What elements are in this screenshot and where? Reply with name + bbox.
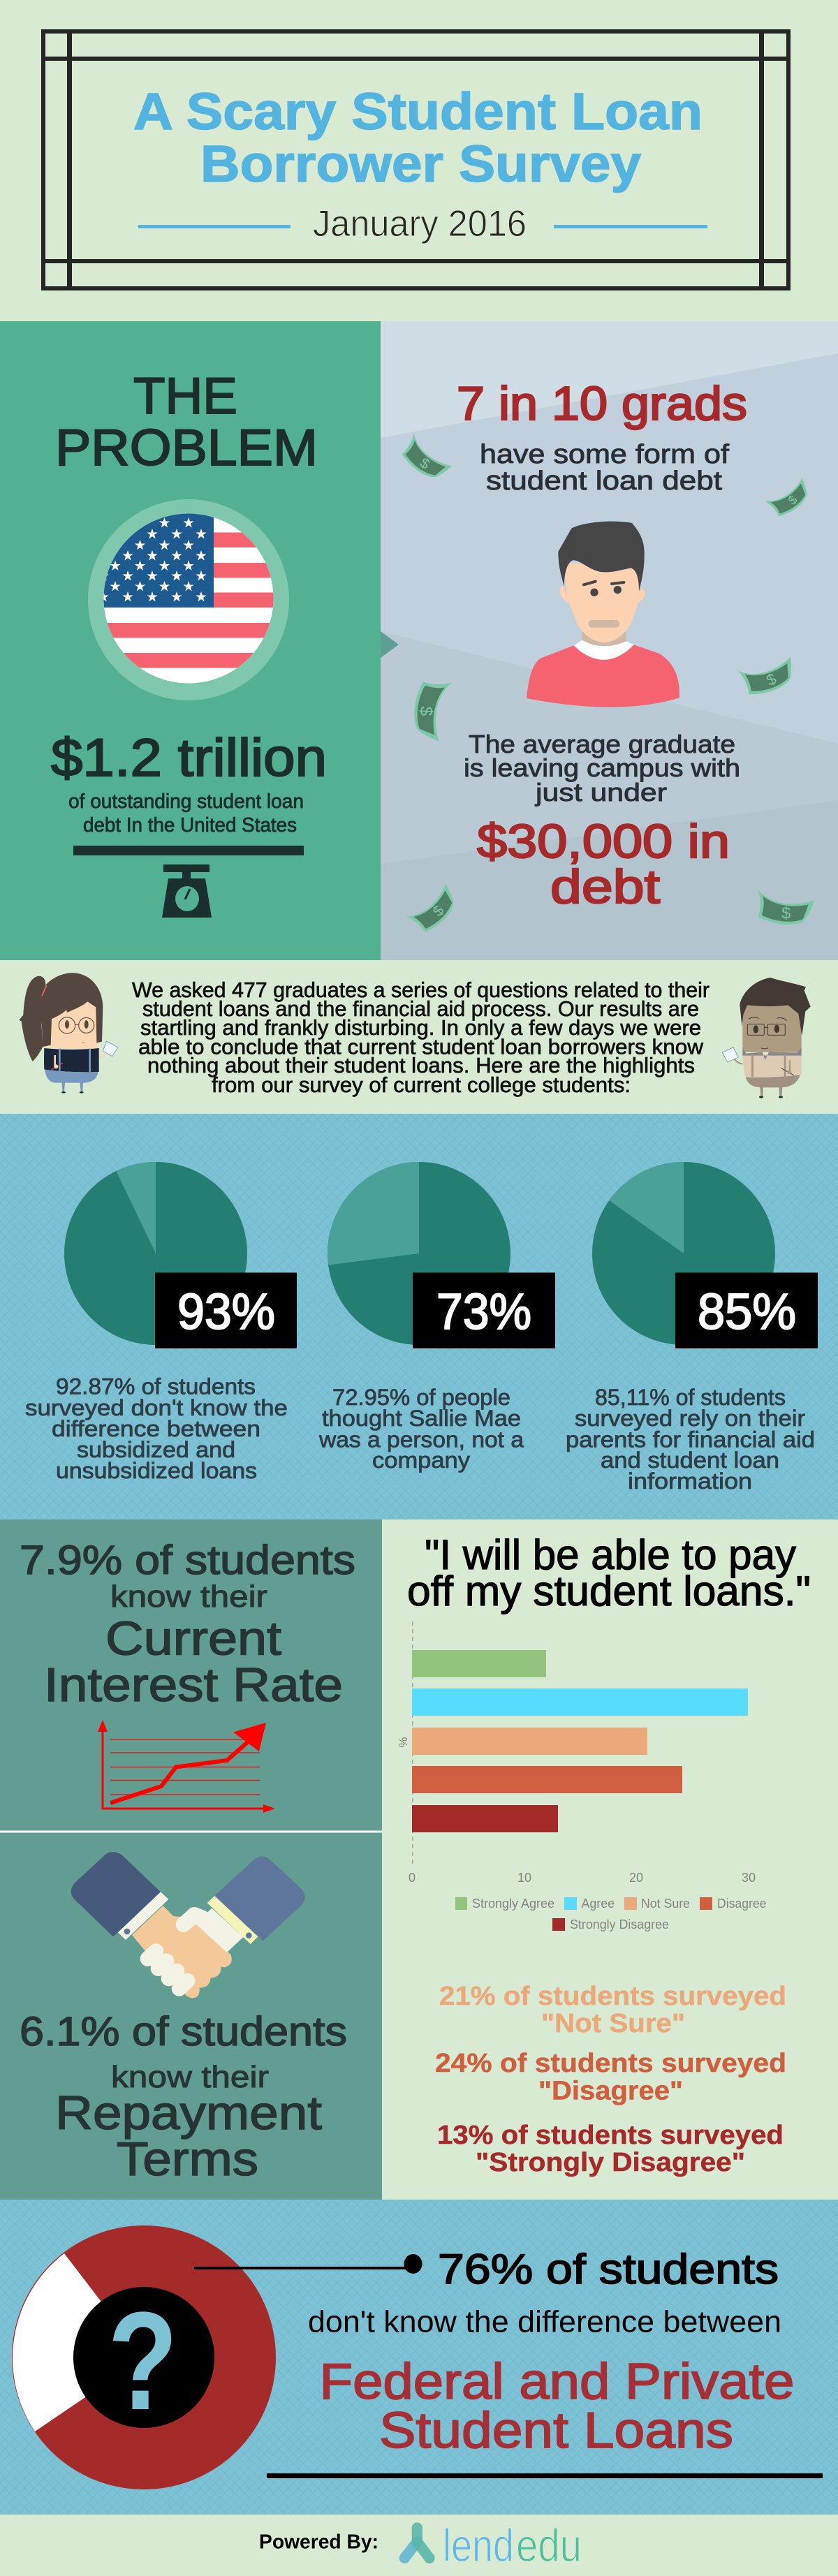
bar chart: repayment confidence xyxy=(397,1621,767,1931)
pie chart: 73% xyxy=(328,1162,555,1348)
stat: 30,000 in debt: debt xyxy=(550,860,660,913)
panel: header xyxy=(41,29,791,290)
bar chart: repayment confidence: 30 xyxy=(742,1871,756,1885)
text: survey intro: able to conclude that current student loan borrowers know xyxy=(138,1035,704,1059)
caption: rely on parents: information xyxy=(628,1469,752,1494)
panel: ability to pay xyxy=(397,1531,811,2177)
text: average graduate: is leaving campus with xyxy=(464,753,740,782)
text: interest rate stat: know their xyxy=(110,1580,267,1614)
caption: subsidized loans: unsubsidized loans xyxy=(56,1458,257,1483)
panel: interest rate knowledge xyxy=(0,1519,382,1832)
icon: rising line chart xyxy=(98,1720,275,1813)
text: survey intro: from our survey of current college students: xyxy=(212,1073,631,1097)
panel: survey intro xyxy=(19,973,811,1098)
stat: not sure xyxy=(439,1982,786,2038)
stat: 76% of students: 76% of students xyxy=(438,2246,779,2292)
stat: 1.2 trillion: $1.2 trillion xyxy=(51,728,327,788)
chart legend: Disagree xyxy=(717,1897,767,1911)
pie chart: 85% xyxy=(592,1162,818,1348)
caption: Sallie Mae xyxy=(318,1385,524,1473)
divider xyxy=(0,1831,382,1832)
text: survey intro: We asked 477 graduates a series of questions related to their xyxy=(132,978,710,1002)
panel: repayment terms knowledge xyxy=(0,1832,382,2200)
text: outstanding debt: debt In the United States xyxy=(83,814,297,837)
title: Borrower Survey xyxy=(200,135,641,193)
text: survey intro: nothing about their student loans. Here are the highlights xyxy=(147,1053,695,1077)
heading: quote: "I will be able to pay xyxy=(425,1531,796,1578)
icon: dollar bill xyxy=(404,878,457,936)
caption: subsidized loans: 92.87% of students xyxy=(56,1374,256,1399)
panel: debt statistics xyxy=(381,321,838,960)
stat: 30,000 in debt: $30,000 in xyxy=(477,815,730,868)
icon: dollar bill: $ xyxy=(781,904,791,922)
icon: US flag circle xyxy=(88,499,289,700)
caption: rely on parents: 85,11% of students xyxy=(595,1385,786,1410)
text: loan debt xyxy=(480,440,730,496)
chart: 76 percent donut: ? xyxy=(108,2282,178,2439)
caption: Sallie Mae: 72.95% of people xyxy=(332,1385,510,1410)
text: interest rate stat: Interest Rate xyxy=(44,1658,343,1712)
callout line xyxy=(194,2254,422,2274)
pie chart: 85%: 85% xyxy=(698,1284,796,1340)
panel: the problem xyxy=(0,321,381,960)
caption: subsidized loans xyxy=(25,1374,288,1483)
icon: girl with book xyxy=(19,973,118,1094)
icon: dollar bill xyxy=(762,469,811,522)
header frame xyxy=(41,29,791,290)
caption: subsidized loans: difference between xyxy=(52,1416,260,1441)
caption: Sallie Mae: thought Sallie Mae xyxy=(322,1406,521,1431)
date with rules xyxy=(138,203,707,244)
text: repayment stat: Terms xyxy=(117,2133,258,2186)
chart legend: Agree xyxy=(581,1897,615,1911)
text: loan debt: have some form of xyxy=(480,440,730,469)
text: interest rate stat: 7.9% of students xyxy=(20,1538,355,1583)
text: loan debt: student loan debt xyxy=(486,466,723,496)
icon: dollar bill: $ xyxy=(786,492,800,508)
text: interest rate stat: Current xyxy=(105,1612,281,1665)
text: outstanding debt xyxy=(68,790,304,837)
heading: federal and private loans: Student Loans xyxy=(379,2403,733,2459)
icon: dollar bill: $ xyxy=(429,903,448,920)
bar chart: repayment confidence: 20 xyxy=(629,1871,643,1885)
icon: dollar bill xyxy=(399,670,473,748)
icon: dollar bill xyxy=(402,434,452,477)
text: average graduate: just under xyxy=(535,778,667,807)
heading: the problem: THE xyxy=(133,368,237,425)
icon: graduate xyxy=(527,522,679,707)
icon: dollar bill xyxy=(747,868,821,940)
caption: Sallie Mae: company xyxy=(372,1448,470,1473)
title xyxy=(133,82,703,193)
pie chart: 73%: 73% xyxy=(436,1284,531,1340)
caption: rely on parents: surveyed rely on their xyxy=(575,1406,805,1431)
chart legend xyxy=(455,1897,767,1931)
text: average graduate: The average graduate xyxy=(469,730,735,758)
heading: the problem: PROBLEM xyxy=(55,420,318,476)
caption: Sallie Mae: was a person, not a xyxy=(318,1427,524,1452)
icon: dollar bill: $ xyxy=(416,706,435,716)
caption: rely on parents: and student loan xyxy=(601,1448,779,1473)
logo: lendedu: edu xyxy=(516,2519,582,2571)
icon: dollar bill xyxy=(730,637,800,708)
heading: quote: off my student loans." xyxy=(407,1568,811,1614)
text: interest rate stat xyxy=(20,1538,355,1712)
panel: footer xyxy=(259,2519,582,2571)
text: repayment stat: know their xyxy=(111,2060,269,2094)
icon: dollar bill: $ xyxy=(764,670,779,689)
date with rules: January 2016 xyxy=(313,203,527,244)
text: difference: don't know the difference between xyxy=(308,2305,781,2339)
icon: handshake xyxy=(71,1852,305,1998)
stat: strongly disagree: "Strongly Disagree" xyxy=(476,2148,745,2177)
bar chart: repayment confidence: 0 xyxy=(409,1871,416,1885)
stat: 7 in 10 grads: 7 in 10 grads xyxy=(457,377,747,430)
bar chart: repayment confidence: % xyxy=(397,1737,410,1748)
stat: disagree xyxy=(435,2049,786,2106)
caption: rely on parents xyxy=(566,1385,815,1494)
stat: not sure: "Not Sure" xyxy=(541,2009,685,2038)
pie chart: 93%: 93% xyxy=(177,1284,275,1340)
panel: survey highlights xyxy=(0,1114,838,1519)
chart legend: Not Sure xyxy=(641,1897,690,1911)
logo: lendedu: lend xyxy=(443,2519,514,2571)
heading: federal and private loans: Federal and Private xyxy=(320,2354,795,2410)
caption: subsidized loans: surveyed don't know the xyxy=(25,1395,288,1420)
logo: lendedu xyxy=(404,2519,582,2571)
text: powered by: Powered By: xyxy=(259,2531,378,2553)
stat: disagree: 24% of students surveyed xyxy=(435,2049,786,2078)
text: average graduate xyxy=(464,730,740,807)
pie chart: 93% xyxy=(64,1162,297,1348)
heading: the problem xyxy=(55,368,318,476)
stat: strongly disagree xyxy=(437,2121,784,2177)
stat: strongly disagree: 13% of students surveyed xyxy=(437,2121,784,2150)
text: survey intro xyxy=(132,978,710,1097)
text: repayment stat xyxy=(20,2009,347,2186)
text: survey intro: student loans and the financial aid process. Our results are xyxy=(142,996,699,1021)
arrow: pointer xyxy=(381,631,399,658)
heading: federal and private loans xyxy=(320,2354,795,2459)
stat: not sure: 21% of students surveyed xyxy=(439,1982,786,2011)
chart: 76 percent donut xyxy=(12,2225,276,2489)
bar chart: repayment confidence: 10 xyxy=(517,1871,531,1885)
text: outstanding debt: of outstanding student loan xyxy=(68,790,304,813)
icon: dollar bill: $ xyxy=(418,455,432,473)
text: repayment stat: 6.1% of students xyxy=(20,2009,347,2054)
stat: 30,000 in debt xyxy=(477,815,730,913)
chart legend: Strongly Agree xyxy=(472,1897,554,1911)
chart legend: Strongly Disagree xyxy=(570,1918,669,1931)
stat: disagree: "Disagree" xyxy=(538,2077,683,2106)
icon: man with book xyxy=(722,978,811,1098)
heading: quote xyxy=(407,1531,811,1614)
caption: rely on parents: parents for financial aid xyxy=(566,1427,815,1452)
text: survey intro: startling and frankly disturbing. In only a few days we were xyxy=(140,1015,701,1040)
panel: federal and private xyxy=(0,2200,838,2515)
icon: scale xyxy=(73,846,304,918)
caption: subsidized loans: subsidized and xyxy=(77,1437,235,1462)
title: A Scary Student Loan xyxy=(133,82,703,140)
text: repayment stat: Repayment xyxy=(55,2086,322,2140)
